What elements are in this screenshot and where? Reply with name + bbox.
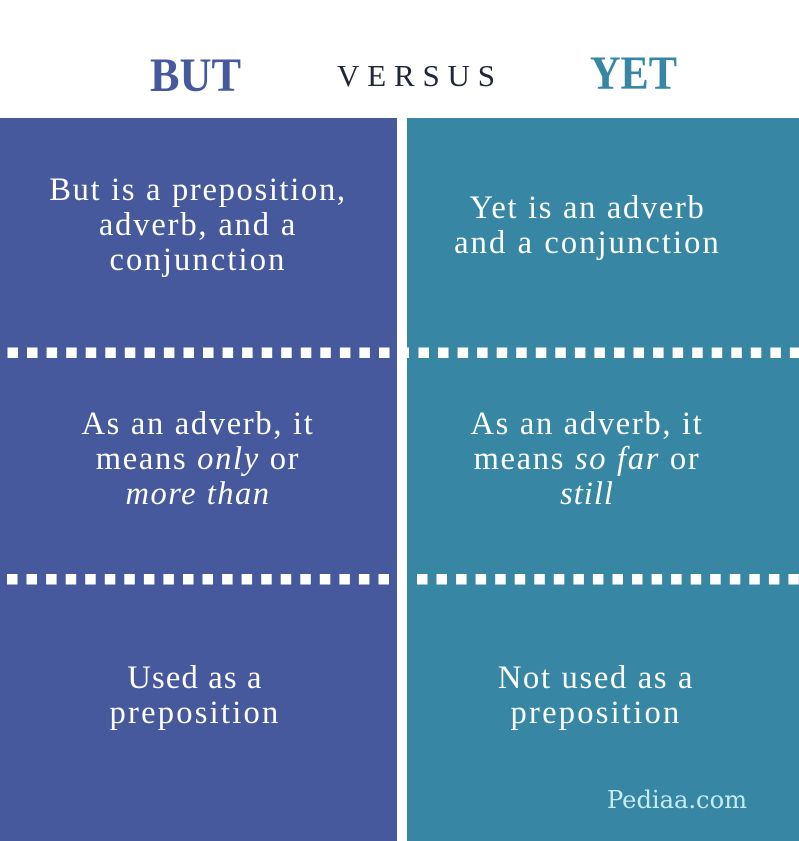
text: yet adverb meaning: As an adverb, it [471, 406, 703, 442]
text: but adverb meaning: means only or [96, 441, 300, 477]
text: but preposition use: Used as a [127, 660, 263, 696]
text: yet adverb meaning: still [560, 476, 614, 512]
text: but adverb meaning: more than [126, 476, 270, 512]
text: yet definition: Yet is an adverb [469, 190, 706, 226]
logo: pediaa.com: Pediaa.com [607, 786, 747, 814]
panel: yet column [407, 118, 799, 841]
text: but adverb meaning: As an adverb, it [82, 406, 314, 442]
heading: versus: VERSUS [337, 58, 495, 93]
text: yet adverb meaning: means so far or [474, 441, 700, 477]
text: but preposition use: preposition [110, 695, 280, 731]
heading: but: BUT [150, 49, 241, 102]
dotted divider: row 1 [8, 348, 799, 358]
heading: yet: YET [590, 47, 677, 100]
dotted divider: row 2 [7, 574, 799, 584]
text: yet preposition use: Not used as a [498, 660, 694, 696]
text: yet preposition use: preposition [511, 695, 681, 731]
text: but definition: conjunction [109, 242, 287, 278]
panel: but column [0, 118, 397, 841]
text: but definition: adverb, and a [99, 207, 297, 243]
text: yet definition: and a conjunction [454, 225, 721, 261]
text: but definition: But is a preposition, [49, 172, 347, 208]
